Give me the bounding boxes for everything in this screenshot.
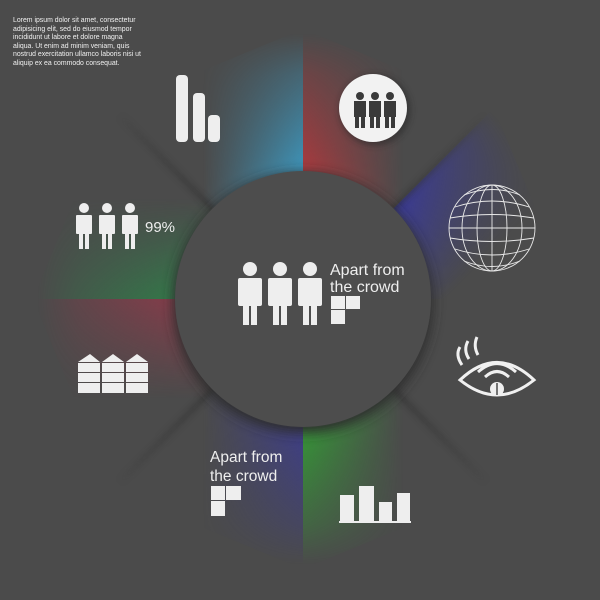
icon: people 99%: [76, 203, 175, 249]
icon: eye: [458, 337, 534, 396]
icon: center people: [238, 262, 322, 325]
text: center heading: the crowd: [330, 279, 399, 296]
text: center heading: [330, 262, 405, 324]
text block: lorem: aliquip ex ea commodo consequat.: [13, 60, 120, 67]
icon: bar chart bottom: [339, 486, 411, 523]
text block: lorem: adipisicing elit, sed do eiusmod tempor: [13, 26, 132, 33]
text block: lorem: incididunt ut labore et dolore magna: [13, 34, 123, 41]
text: center heading: Apart from: [330, 262, 405, 279]
icon: globe: [449, 185, 535, 271]
icon: houses: [78, 354, 148, 393]
wedge glows: [55, 42, 506, 551]
text block: lorem: aliqua. Ut enim ad minim veniam, quis: [13, 43, 129, 50]
text: bottom-left heading: [210, 449, 282, 516]
center circle: [173, 171, 433, 433]
text block: lorem: Lorem ipsum dolor sit amet, consectetur: [13, 17, 136, 24]
text: 99%: 99%: [145, 219, 175, 236]
text: bottom-left heading: the crowd: [210, 468, 277, 485]
text: bottom-left heading: Apart from: [210, 449, 282, 466]
icon: people in white circle: [339, 74, 411, 146]
text block: lorem: nostrud exercitation ullamco laboris nisi ut: [13, 51, 141, 58]
icon: bar chart top: [176, 75, 220, 142]
text block: lorem: [13, 16, 141, 67]
